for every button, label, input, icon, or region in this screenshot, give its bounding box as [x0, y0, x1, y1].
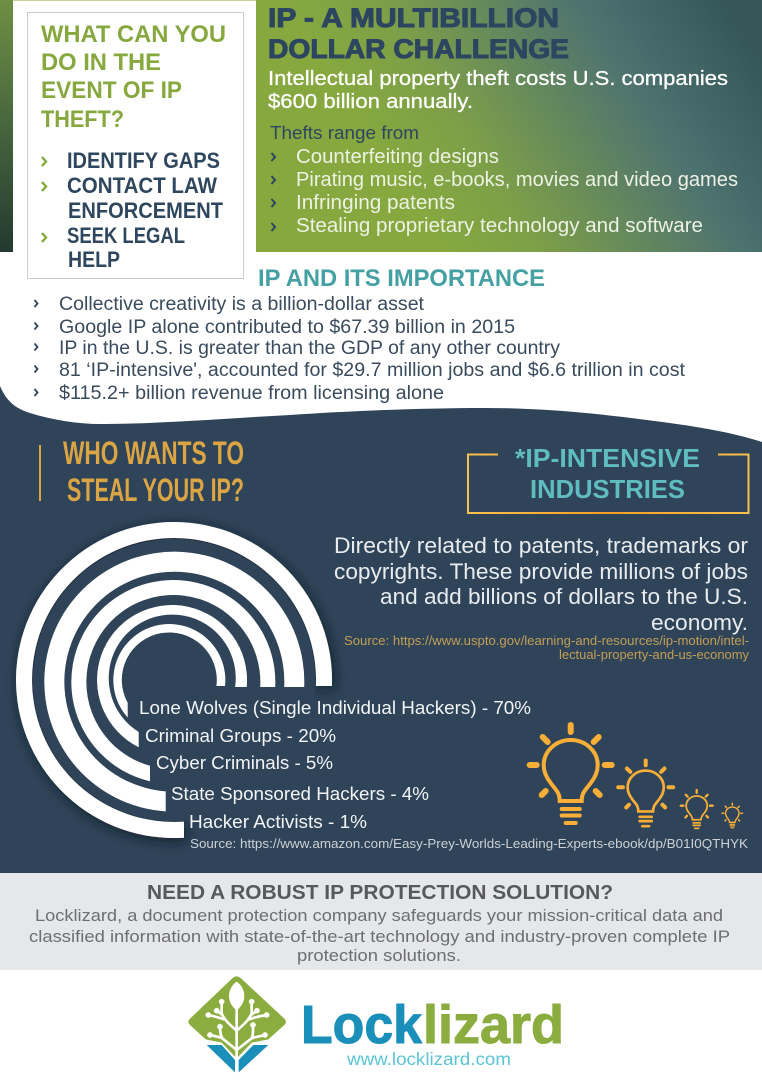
list: ip importance: Collective creativity is a billion-dollar asset [59, 294, 425, 315]
heading: what can you do: THEFT? [41, 106, 124, 133]
chart labels: Lone Wolves (Single Individual Hackers) - 70% [139, 697, 531, 718]
icon: small bulb [681, 790, 713, 828]
heading: multibillion dollar challenge: DOLLAR CHALLENGE [268, 34, 569, 64]
heading: need a robust solution: NEED A ROBUST IP PROTECTION SOLUTION? [147, 881, 613, 904]
icon: large bulb [530, 725, 612, 823]
list: ip importance [34, 294, 686, 404]
list: theft types: Stealing proprietary technology and software [296, 215, 703, 237]
chart labels: Cyber Criminals - 5% [156, 752, 333, 773]
list: theft types: Infringing patents [296, 192, 455, 214]
icon: medium bulb [618, 760, 673, 826]
heading: what can you do: DO IN THE [41, 49, 161, 76]
heading: multibillion dollar challenge [268, 3, 569, 64]
list: theft types: Counterfeiting designs [296, 146, 499, 168]
wordmark: locklizard: Lock [301, 995, 423, 1055]
callout: ip-intensive industries: *IP-INTENSIVE [515, 445, 700, 473]
text: locklizard description: protection solutions. [297, 946, 461, 965]
heading: who wants to steal your ip [39, 435, 244, 508]
wordmark: locklizard: lizard [423, 995, 564, 1055]
list: actions: ENFORCEMENT [68, 198, 223, 223]
text: uspto source: Source: https://www.uspto.gov/learning-and-resources/ip-motion/intel- [344, 634, 749, 648]
list: ip importance: Google IP alone contributed to $67.39 billion in 2015 [59, 317, 515, 338]
text: locklizard description: Locklizard, a document protection company safeguards your mission-critical data and [35, 906, 723, 925]
heading: who wants to steal your ip: WHO WANTS TO [63, 435, 244, 471]
heading: what can you do: EVENT OF IP [41, 77, 182, 104]
list: actions: SEEK LEGAL [67, 223, 185, 248]
list: actions: CONTACT LAW [67, 173, 218, 198]
callout: ip-intensive industries [468, 445, 748, 513]
text: amazon source: Source: https://www.amazon.com/Easy-Prey-Worlds-Leading-Experts-ebook/dp/B01I0QTHYK [190, 836, 748, 851]
text: ip-intensive description: and add billions of dollars to the U.S. [380, 584, 748, 609]
callout: ip-intensive industries: INDUSTRIES [530, 476, 685, 504]
text: locklizard description: classified information with state-of-the-art technology and industry-proven complete IP [29, 927, 730, 946]
list: actions: HELP [68, 247, 120, 272]
text: website url: www.locklizard.com [346, 1049, 511, 1069]
text: uspto source [344, 634, 750, 662]
panel: navy background [0, 386, 762, 873]
logo: locklizard [188, 976, 564, 1073]
chart labels: State Sponsored Hackers - 4% [171, 783, 429, 804]
chart labels [139, 697, 531, 832]
list: theft types [272, 146, 738, 237]
icon: light bulbs [530, 725, 743, 828]
text: locklizard description [29, 906, 730, 965]
panel: multibillion dollar challenge [256, 0, 762, 252]
list: ip importance: $115.2+ billion revenue from licensing alone [59, 383, 444, 404]
icon: locklizard tree diamond [188, 976, 286, 1073]
text: annual cost: Intellectual property theft costs U.S. companies [268, 68, 728, 90]
text: thefts range from: Thefts range from [270, 123, 419, 143]
text: ip-intensive description [334, 533, 748, 635]
panel: left gradient strip [0, 0, 13, 252]
heading: who wants to steal your ip: STEAL YOUR IP? [67, 472, 244, 508]
text: ip-intensive description: copyrights. These provide millions of jobs [334, 559, 748, 584]
wordmark: locklizard [301, 995, 564, 1055]
text: ip-intensive description: Directly related to patents, trademarks or [334, 533, 748, 558]
chart labels: Criminal Groups - 20% [145, 725, 336, 746]
panel: what can you do [13, 0, 256, 278]
list: actions: IDENTIFY GAPS [67, 148, 220, 173]
text: annual cost [268, 68, 728, 113]
list: ip importance: 81 ‘IP-intensive', accounted for $29.7 million jobs and $6.6 trillion in cost [59, 360, 686, 381]
text: uspto source: lectual-property-and-us-economy [559, 648, 750, 662]
text: ip-intensive description: economy. [651, 610, 748, 635]
heading: ip and its importance: IP AND ITS IMPORTANCE [258, 265, 545, 292]
heading: multibillion dollar challenge: IP - A MULTIBILLION [268, 3, 559, 33]
heading: what can you do [41, 21, 226, 133]
chart: radial bars of attackers [16, 522, 332, 838]
list: ip importance: IP in the U.S. is greater than the GDP of any other country [59, 338, 561, 359]
heading: what can you do: WHAT CAN YOU [41, 21, 226, 48]
panel: call to action [0, 873, 762, 970]
chart labels: Hacker Activists - 1% [189, 811, 367, 832]
text: annual cost: $600 billion annually. [268, 91, 473, 113]
list: actions [42, 148, 223, 272]
list: theft types: Pirating music, e-books, movies and video games [296, 169, 738, 191]
icon: tiny bulb [722, 803, 743, 828]
